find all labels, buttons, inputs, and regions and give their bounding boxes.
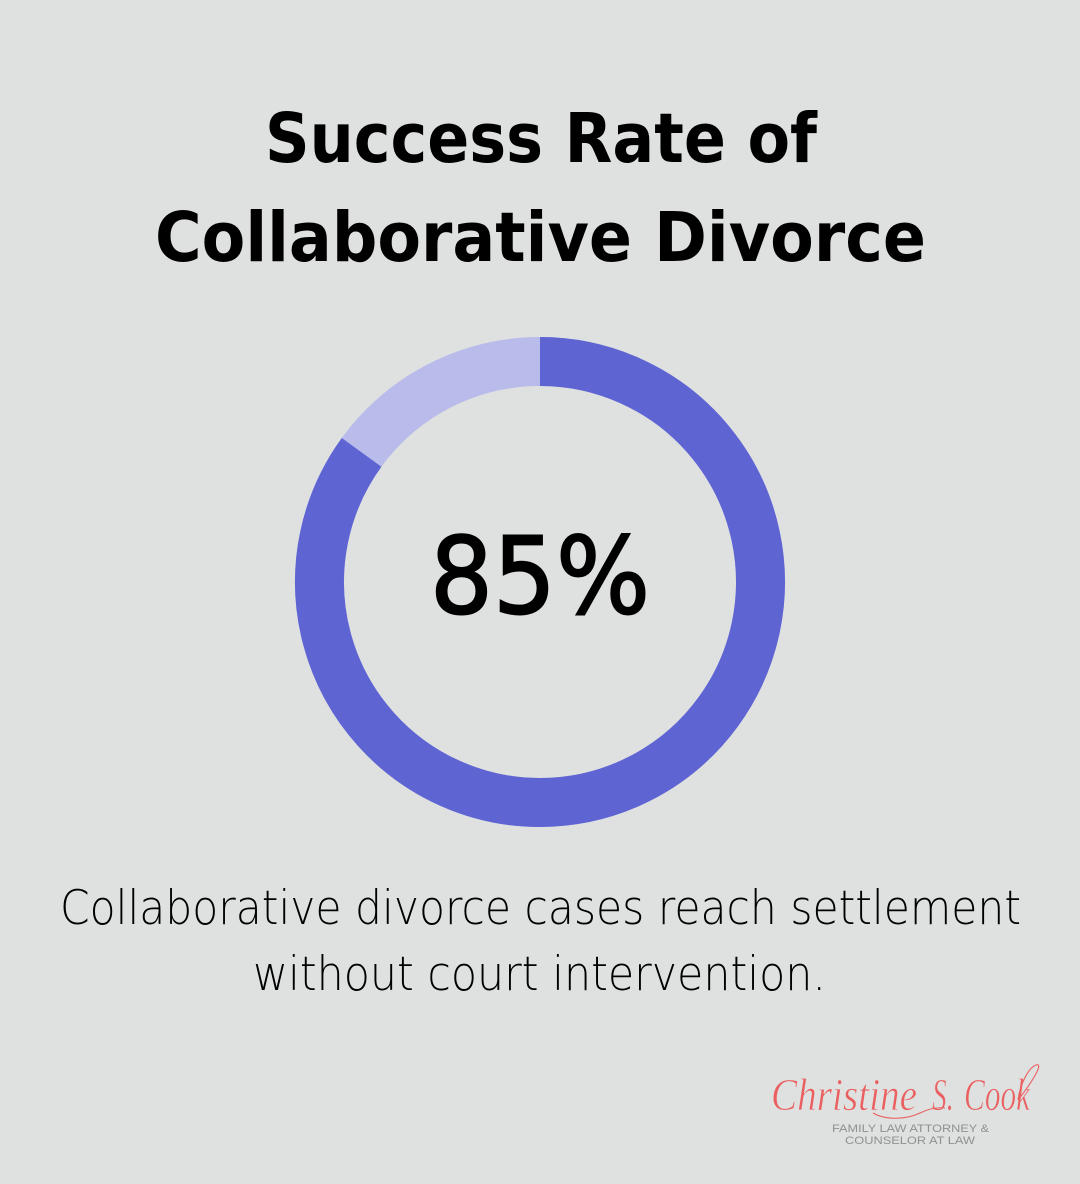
donut value arc: 85%	[319, 362, 760, 802]
title	[155, 99, 926, 278]
description text: without court intervention.	[253, 947, 826, 1002]
title: Collaborative Divorce	[155, 198, 926, 278]
logo tagline: FAMILY LAW ATTORNEY &	[832, 1123, 990, 1135]
logo signature: S.	[932, 1069, 954, 1120]
logo signature: Christine	[771, 1069, 917, 1120]
description text	[60, 881, 1021, 1002]
logo tagline: COUNSELOR AT LAW	[845, 1135, 976, 1147]
big number: 85%: 85%	[430, 515, 650, 638]
logo signature	[771, 1069, 1031, 1120]
logo tagline	[832, 1123, 990, 1147]
donut track: remaining 15%	[320, 362, 760, 802]
logo signature: Cook	[964, 1069, 1031, 1120]
logo: Christine S. Cook	[771, 1065, 1039, 1147]
logo swash	[873, 1065, 1039, 1118]
title: Success Rate of	[265, 99, 818, 179]
donut chart: 85%	[319, 362, 760, 802]
